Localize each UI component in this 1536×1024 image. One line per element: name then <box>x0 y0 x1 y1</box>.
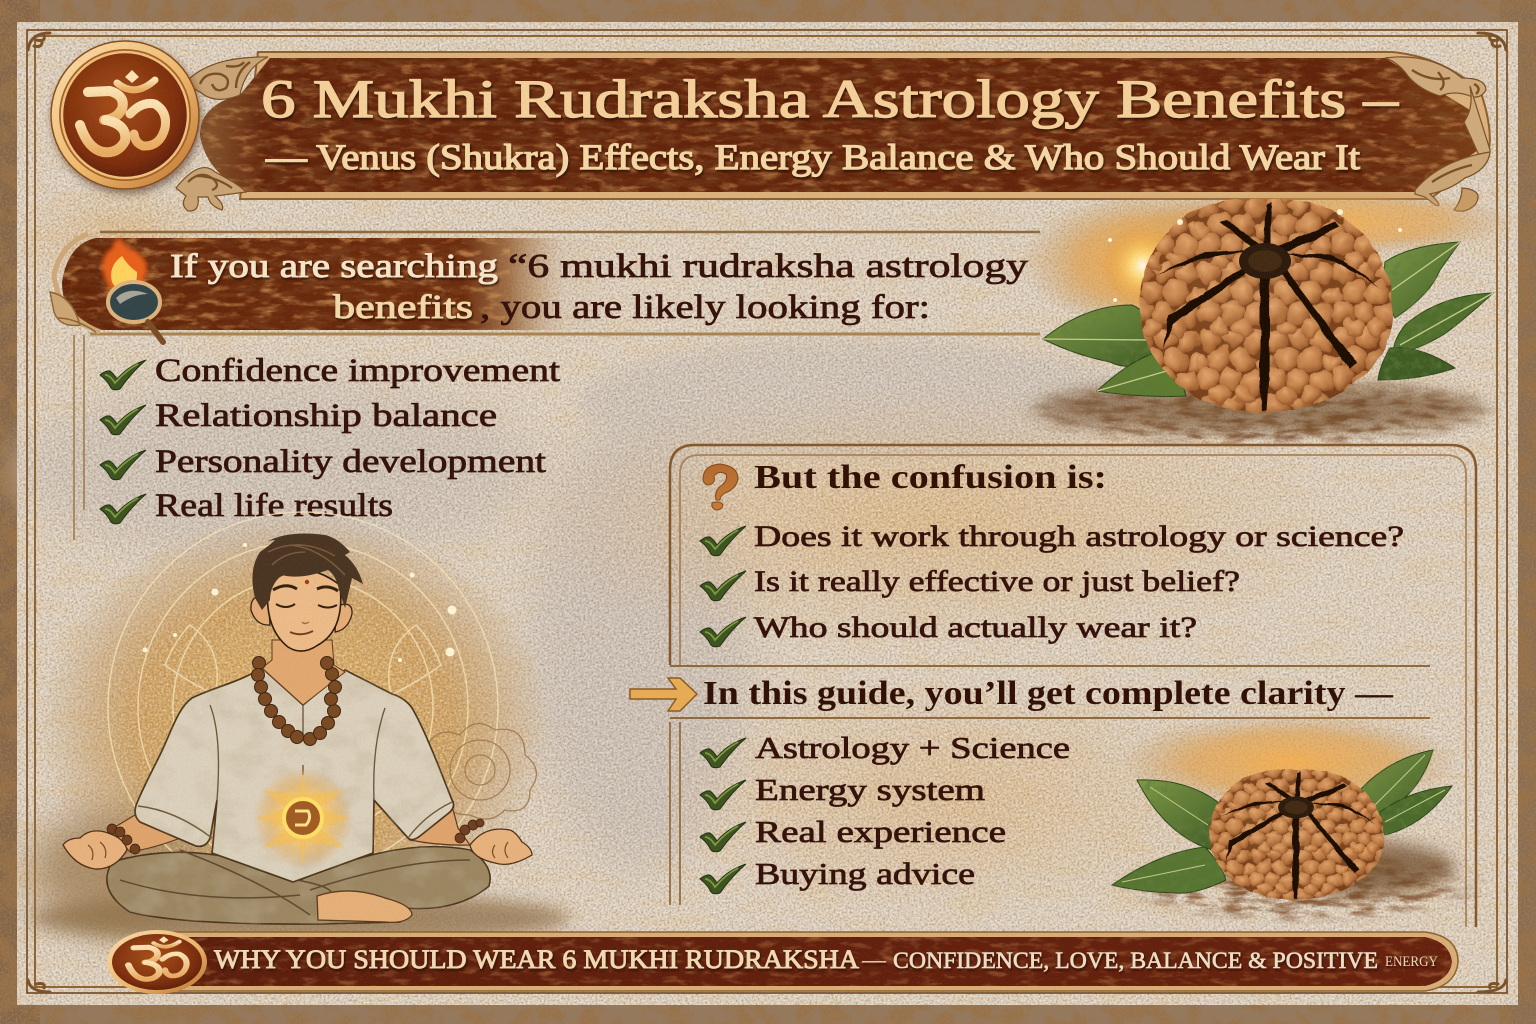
item: personality: Personality development <box>155 444 546 480</box>
intro text line 2 <box>333 289 930 326</box>
ears <box>251 596 352 632</box>
halo and mandala <box>30 512 570 944</box>
item: results: Real life results <box>155 488 393 524</box>
chakra glow <box>253 768 353 868</box>
question 2: Is it really effective or just belief? <box>754 565 1240 598</box>
checklist: what readers look for <box>100 353 560 524</box>
om medallion <box>51 41 199 189</box>
hands and bracelets <box>63 819 532 869</box>
item: real experience: Real experience <box>755 814 1006 849</box>
intro text line 1: If you are searching <box>170 248 498 285</box>
icon: om symbol <box>80 70 166 152</box>
forearms <box>110 806 470 852</box>
meditating person <box>30 512 570 944</box>
heading: in this guide: In this guide, you’ll get complete clarity — <box>703 675 1394 712</box>
heading: but the confusion is: But the confusion is: <box>754 459 1107 496</box>
item: buying advice: Buying advice <box>755 856 975 891</box>
large rudraksha bead with leaves <box>1015 182 1520 450</box>
footer text: — <box>861 945 887 974</box>
intro text line 2: benefits <box>333 289 473 326</box>
item: real experience <box>700 814 1006 852</box>
hair <box>252 533 363 610</box>
item: confidence: Confidence improvement <box>155 353 560 389</box>
subtitle: — Venus (Shukra) Effects, Energy Balance & Who Should Wear It <box>265 137 1360 177</box>
question 1: Does it work through astrology or science? <box>754 520 1404 553</box>
question 1 <box>700 520 1404 556</box>
footer text: ENERGY <box>1385 954 1438 970</box>
icon: question mark <box>703 464 738 510</box>
question 3 <box>700 611 1197 647</box>
shirt <box>135 668 454 882</box>
leaves <box>1112 750 1452 893</box>
title banner <box>176 52 1490 211</box>
legs <box>107 847 490 924</box>
mala necklace <box>252 656 342 746</box>
footer banner <box>107 930 1458 994</box>
facial features <box>273 580 338 634</box>
bead <box>1199 759 1393 909</box>
search intro banner <box>50 232 1040 342</box>
intro text line 1: “6 mukhi rudraksha astrology <box>508 248 1028 285</box>
item: relationship: Relationship balance <box>155 398 497 434</box>
footer text: WHY YOU SHOULD WEAR 6 MUKHI RUDRAKSHA <box>214 945 859 974</box>
left frame rule <box>74 335 84 540</box>
guide clarity strip <box>630 666 1430 718</box>
item: energy system: Energy system <box>755 772 985 807</box>
item: energy system <box>700 772 985 810</box>
bead <box>1125 182 1405 427</box>
title banner left ornament <box>176 57 268 211</box>
face <box>267 570 341 651</box>
footer text: CONFIDENCE, LOVE, BALANCE & POSITIVE <box>893 948 1378 973</box>
arrow <box>630 678 697 711</box>
icon: flame over magnifying glass <box>102 238 163 342</box>
item: astrology and science: Astrology + Science <box>755 730 1070 765</box>
item: buying advice <box>700 856 975 894</box>
title: 6 Mukhi Rudraksha Astrology Benefits – <box>261 69 1399 129</box>
leaves <box>1043 242 1493 396</box>
small rudraksha bead with leaves <box>1110 714 1490 925</box>
intro text line 1 <box>170 248 1028 285</box>
panel: the confusion <box>670 445 1476 927</box>
icon: footer om medallion <box>107 930 207 994</box>
intro text line 2: , you are likely looking for: <box>480 289 930 326</box>
panel: what you will get <box>670 722 1070 905</box>
question 3: Who should actually wear it? <box>754 611 1197 644</box>
item: relationship <box>100 398 497 435</box>
title banner right ornament <box>1385 57 1490 211</box>
footer text <box>214 945 1438 974</box>
foot <box>317 891 412 922</box>
neck <box>262 640 345 705</box>
item: astrology and science <box>700 730 1070 768</box>
question 2 <box>700 565 1240 601</box>
